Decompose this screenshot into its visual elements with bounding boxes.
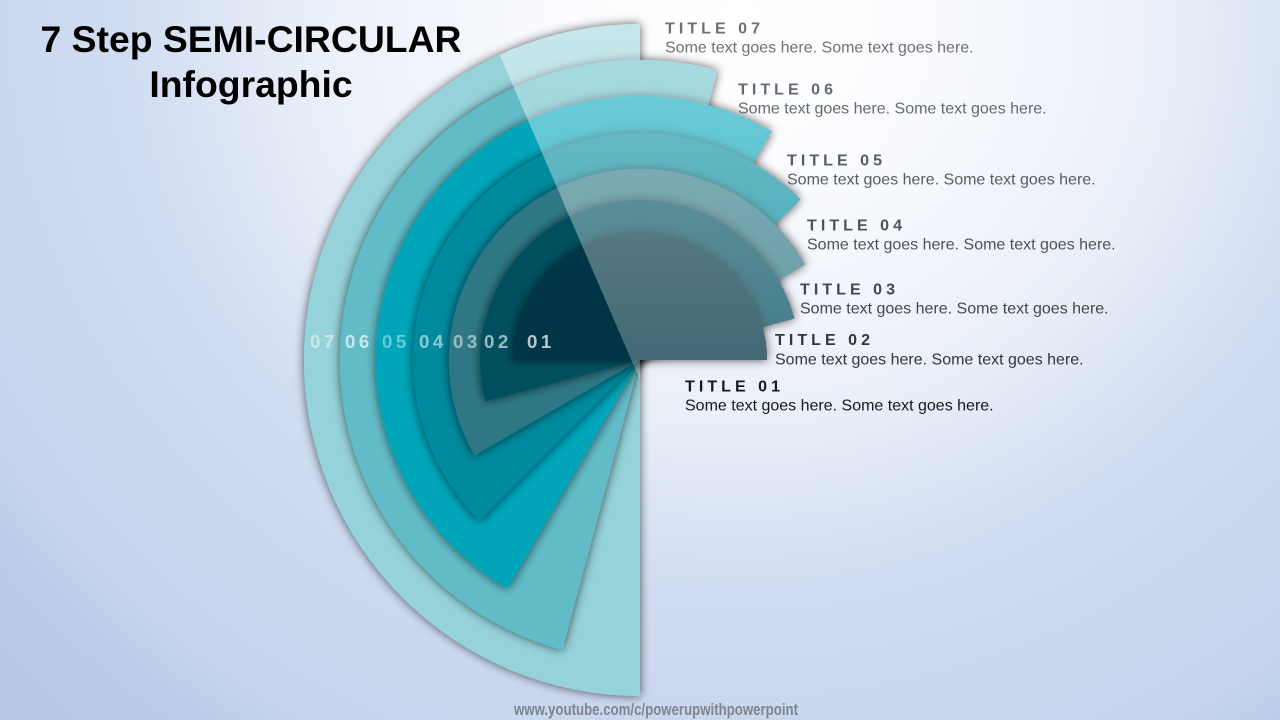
text block: title 04: TITLE 04 xyxy=(807,218,906,234)
translucent highlight overlay xyxy=(500,24,806,380)
sector 03 xyxy=(379,99,805,456)
text block: title 07 xyxy=(665,20,974,56)
text block: title 02: TITLE 02 xyxy=(775,332,874,349)
semi-circular chart xyxy=(296,16,810,704)
text block: title 03 xyxy=(800,282,1109,318)
text block: title 01: Some text goes here. Some text goes here. xyxy=(685,398,994,414)
text block: title 06: TITLE 06 xyxy=(738,82,837,98)
text block: title 03: Some text goes here. Some text goes here. xyxy=(800,300,1109,318)
sector 05 xyxy=(279,0,772,589)
text block: title 04: Some text goes here. Some text goes here. xyxy=(807,236,1116,254)
text block: title 07: TITLE 07 xyxy=(665,20,764,38)
sector 04 xyxy=(319,39,801,521)
sector 02 xyxy=(444,164,795,401)
number 02: 02 xyxy=(484,331,512,352)
sector 07 xyxy=(304,24,640,696)
text block: title 07: Some text goes here. Some text goes here. xyxy=(665,40,974,56)
text block: title 04 xyxy=(807,218,1116,254)
text block: title 02: Some text goes here. Some text goes here. xyxy=(775,352,1084,368)
text block: title 05: TITLE 05 xyxy=(787,152,886,170)
number 06: 06 xyxy=(345,331,373,352)
number 01: 01 xyxy=(527,331,555,352)
text block: title 05: Some text goes here. Some text goes here. xyxy=(787,172,1096,188)
text block: title 01: TITLE 01 xyxy=(685,378,784,396)
sector 06 xyxy=(273,0,718,650)
text block: title 02 xyxy=(775,332,1084,368)
number 07: 07 xyxy=(310,331,338,352)
text block: title 03: TITLE 03 xyxy=(800,282,899,298)
number 03: 03 xyxy=(453,331,481,352)
watermark url: www.youtube.com/c/powerupwithpowerpoint xyxy=(513,700,798,719)
text block: title 01 xyxy=(685,378,994,414)
sector 01 xyxy=(513,233,767,360)
text block: title 05 xyxy=(787,152,1096,188)
title: Infographic xyxy=(149,63,353,105)
number 05: 05 xyxy=(382,331,410,352)
text block: title 06 xyxy=(738,82,1047,118)
number 04: 04 xyxy=(419,331,447,352)
step numbers xyxy=(310,331,555,352)
text block: title 06: Some text goes here. Some text goes here. xyxy=(738,100,1047,118)
title: 7 Step SEMI-CIRCULAR xyxy=(40,18,462,60)
